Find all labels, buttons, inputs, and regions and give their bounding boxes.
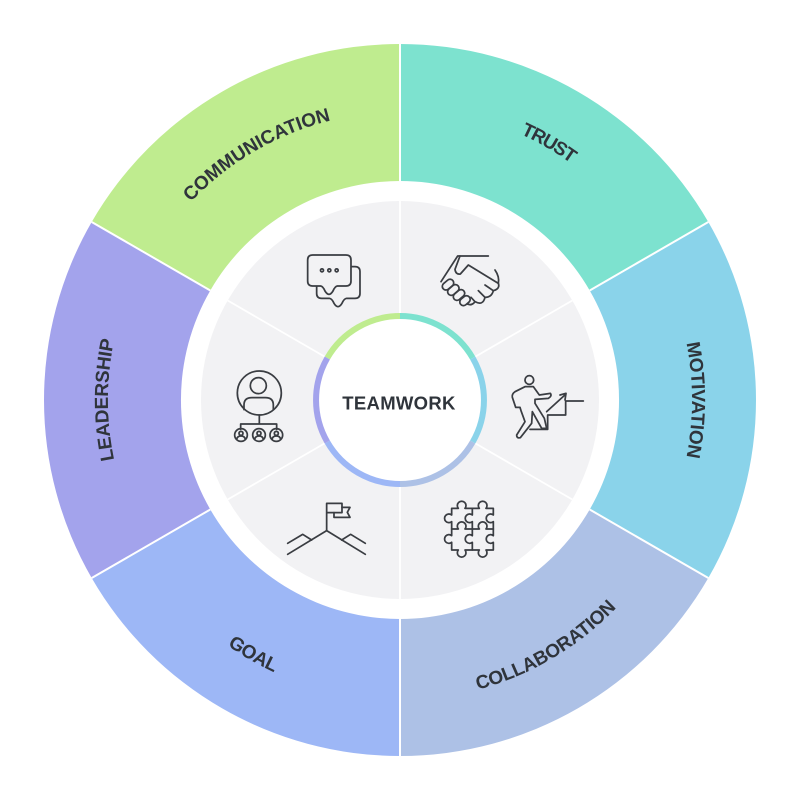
label: leadership: LEADERSHIP [94,338,114,461]
segment: leadership [44,222,210,578]
label: communication: COMMUNICATION [184,108,330,200]
center circle [316,316,484,484]
center title: TEAMWORK [342,392,456,414]
segment: motivation [590,222,756,578]
icon: chat bubbles [308,255,360,307]
label: goal: GOAL [230,637,274,672]
icon: handshake [441,256,499,307]
icon: person climbing stairs [512,376,583,438]
center ring [316,316,484,484]
label: collaboration: COLLABORATION [476,599,616,688]
segment: trust [400,44,708,290]
inner gray panel [201,201,599,599]
label: motivation: MOTIVATION [686,342,706,458]
label: trust: TRUST [524,122,578,161]
segment: collaboration [400,510,708,756]
segment: communication [92,44,400,290]
icon: leader and team [235,371,283,441]
icon: puzzle pieces [445,501,493,557]
segment: goal [92,510,400,756]
icon: flag on mountain [288,503,365,554]
